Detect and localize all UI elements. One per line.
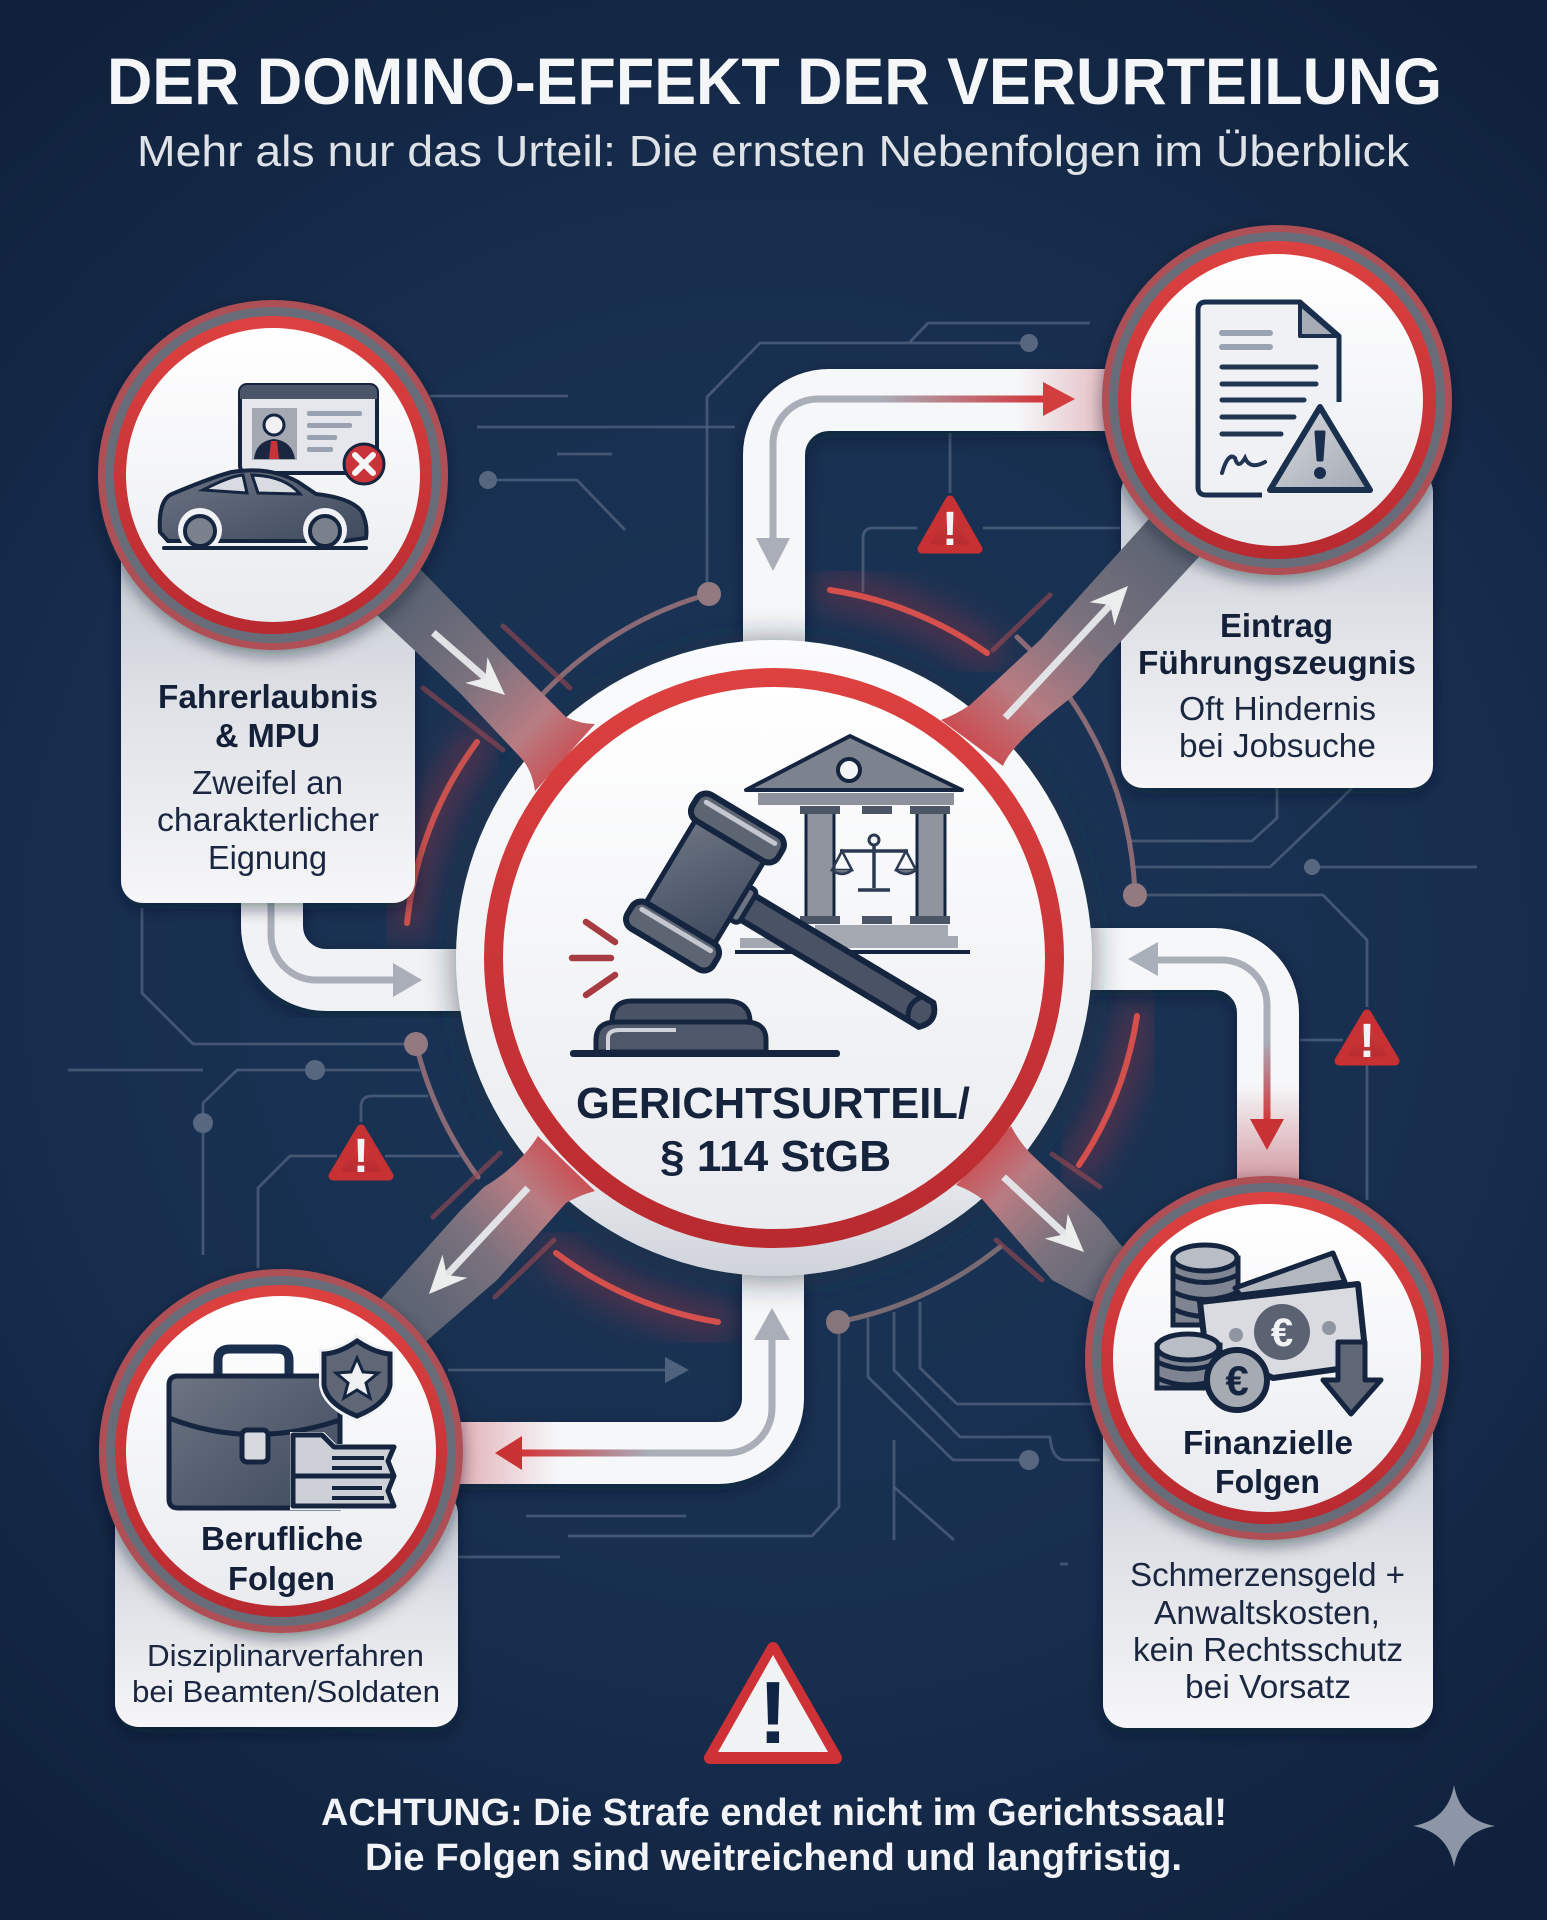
text: Eignung: Eignung <box>208 839 327 876</box>
elbow connector: bottom <box>450 1270 790 1470</box>
heading: Finanzielle Folgen <box>1183 1424 1353 1500</box>
warning triangle: right <box>1339 1014 1395 1068</box>
text: Schmerzensgeld: Schmerzensgeld + <box>1130 1556 1405 1593</box>
heading: Finanzielle Folgen: Finanzielle <box>1183 1424 1353 1461</box>
text: Eignung <box>157 764 379 876</box>
text: Eignung: Zweifel an <box>192 764 343 801</box>
callout: warning text: Die Folgen sind weitreichend und langfristig. <box>365 1837 1182 1879</box>
subtitle: Mehr als nur das Urteil: Die ernsten Nebenfolgen im Überblick <box>137 127 1410 176</box>
warning triangle: top: ! <box>942 503 958 556</box>
heading: Finanzielle Folgen: Folgen <box>1215 1463 1320 1500</box>
heading: Gerichtsurteil: § 114 StGB <box>660 1132 891 1181</box>
icon: cancel badge <box>344 444 384 484</box>
heading: Eintrag Führungszeugnis: Eintrag <box>1220 607 1333 644</box>
icon: sound block <box>570 1001 840 1057</box>
circle: Finanzielle Folgen <box>1085 1176 1449 1540</box>
icon: files <box>290 1432 396 1510</box>
elbow connector: right <box>1080 942 1284 1190</box>
text: Schmerzensgeld: Anwaltskosten, <box>1154 1594 1380 1631</box>
warning triangle: right: ! <box>1359 1015 1375 1068</box>
warning triangle: left: ! <box>353 1130 369 1183</box>
arrow in diagonal: towards Finanzielle Folgen <box>992 1165 1096 1264</box>
diagonal connector: Führungszeugnis <box>941 470 1240 766</box>
heading: Berufliche Folgen: Berufliche <box>201 1520 363 1557</box>
heading: Gerichtsurteil: GERICHTSURTEIL/ <box>576 1079 970 1128</box>
heading: Gerichtsurteil <box>576 1079 970 1181</box>
red arcs around the centre <box>404 582 1147 1334</box>
icon: gavel <box>622 789 972 1085</box>
text: Disziplinarverfahren: bei Beamten/Soldaten <box>132 1674 440 1709</box>
text: Schmerzensgeld: kein Rechtsschutz <box>1133 1631 1403 1668</box>
diagonal connector: Finanzielle Folgen <box>956 1126 1170 1350</box>
icon: briefcase <box>169 1349 340 1508</box>
icon: money: € <box>1225 1357 1249 1404</box>
circle: Führungszeugnis <box>1102 225 1452 575</box>
callout: warning text: ACHTUNG: Die Strafe endet nicht im Gerichtssaal! <box>321 1792 1227 1834</box>
panel: Finanzielle Folgen card <box>1103 1400 1433 1728</box>
icon: strike lines <box>572 922 615 995</box>
icon: driving licence <box>240 385 377 473</box>
icon: car <box>160 470 368 552</box>
warning triangle: top <box>922 500 978 556</box>
icon: court building <box>735 736 970 954</box>
warning triangle: left <box>333 1129 389 1183</box>
icon: sparkle <box>1413 1785 1495 1867</box>
heading: Fahrerlaubnis: Fahrerlaubnis <box>158 678 378 715</box>
text: Jobsuche: Oft Hindernis <box>1179 690 1376 727</box>
elbow connector: left <box>271 895 470 997</box>
centre disc: outer white ring <box>456 640 1092 1276</box>
diagonal connector: Fahrerlaubnis <box>300 490 595 791</box>
icon: large warning triangle <box>710 1648 836 1762</box>
text: Schmerzensgeld: bei Vorsatz <box>1185 1668 1351 1705</box>
panel: Berufliche Folgen card <box>115 1490 458 1727</box>
heading: Fahrerlaubnis: & MPU <box>215 717 320 754</box>
text: Disziplinarverfahren <box>132 1638 440 1709</box>
heading: Fahrerlaubnis <box>158 678 378 754</box>
heading: Eintrag Führungszeugnis <box>1138 607 1416 681</box>
arrow in diagonal: towards Berufliche Folgen <box>417 1176 540 1306</box>
elbow connector: top <box>756 382 1115 650</box>
title: DER DOMINO-EFFEKT DER VERURTEILUNG <box>107 44 1442 118</box>
centre circle <box>484 668 1064 1248</box>
heading: Eintrag Führungszeugnis: Führungszeugnis <box>1138 644 1416 681</box>
circuit lines background <box>68 323 1477 1564</box>
panel: Führungszeugnis card <box>1121 470 1433 788</box>
arrow in diagonal: towards centre <box>422 620 516 708</box>
text: Schmerzensgeld <box>1130 1556 1405 1705</box>
text: Jobsuche <box>1179 690 1376 764</box>
diagonal connector: Berufliche Folgen <box>340 1136 595 1385</box>
circle: Berufliche Folgen <box>99 1269 463 1633</box>
icon: money: € <box>1271 1311 1293 1355</box>
icon: shield <box>323 1339 391 1418</box>
text: Eignung: charakterlicher <box>157 801 379 838</box>
icon: money <box>1157 1245 1381 1414</box>
panel: Fahrerlaubnis card <box>121 520 415 903</box>
heading: Berufliche Folgen: Folgen <box>228 1560 335 1597</box>
circle: Fahrerlaubnis <box>98 300 448 650</box>
text: Disziplinarverfahren: Disziplinarverfahren <box>147 1638 424 1673</box>
heading: Berufliche Folgen <box>201 1520 363 1597</box>
icon: large warning triangle: ! <box>758 1663 788 1762</box>
icon: document with warning <box>1198 302 1370 495</box>
arrow in diagonal: towards Führungszeugnis <box>993 574 1140 729</box>
text: Jobsuche: bei Jobsuche <box>1179 727 1376 764</box>
callout: warning text <box>321 1792 1227 1879</box>
